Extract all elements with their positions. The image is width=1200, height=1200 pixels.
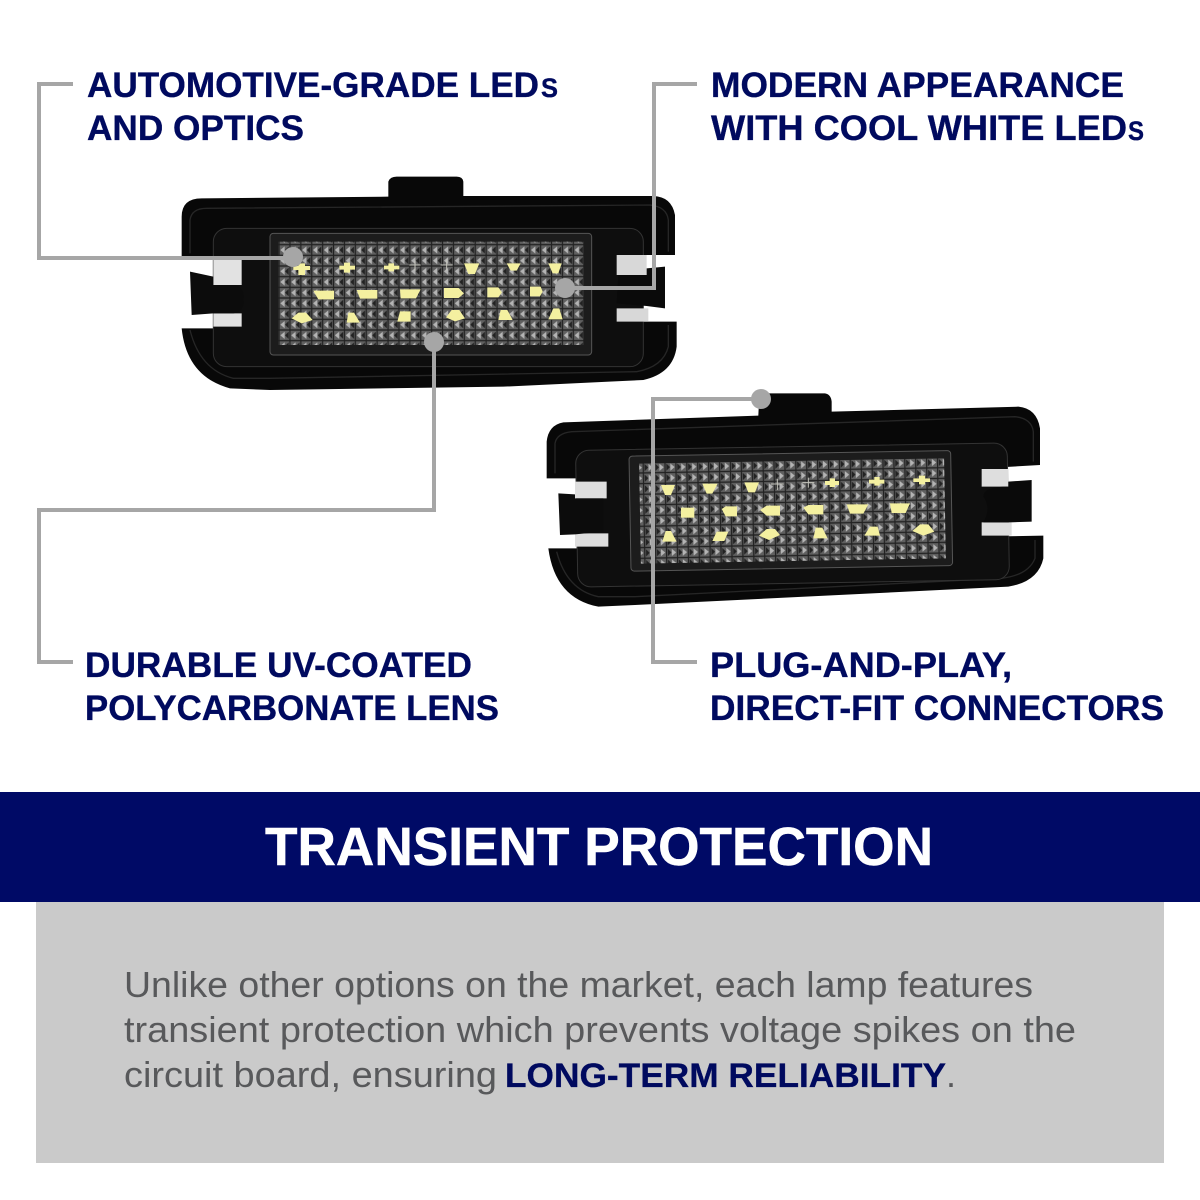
- banner heading: TRANSIENT PROTECTION: [265, 817, 933, 877]
- right mounting tabs: [982, 469, 1012, 536]
- housing trim: [190, 205, 668, 378]
- callout text: plug-and-play direct-fit connectors: DIRECT-FIT CONNECTORS: [710, 689, 1164, 728]
- description text: [124, 964, 1076, 1095]
- callout text: durable UV-coated polycarbonate lens: DURABLE UV-COATED: [85, 646, 472, 685]
- inner lens: [270, 233, 592, 355]
- lamp photo: upper lamp: [182, 177, 677, 390]
- inner lens: [629, 451, 953, 571]
- banner: transient protection: [0, 792, 1200, 902]
- housing trim: [555, 417, 1035, 597]
- callout text: modern appearance with cool white LEDs: [711, 66, 1144, 148]
- callout text: modern appearance with cool white LEDs: WITH COOL WHITE LED: [711, 109, 1127, 148]
- callout text: modern appearance with cool white LEDs: MODERN APPEARANCE: [711, 66, 1124, 105]
- description text: circuit board, ensuring: [124, 1054, 497, 1095]
- lamp housing: [182, 177, 677, 390]
- callout leader: automotive-grade LEDs: [39, 84, 303, 267]
- lens frame: [213, 228, 643, 367]
- textured optic grid: [639, 458, 946, 564]
- description text: transient protection which prevents voltage spikes on the: [124, 1009, 1076, 1050]
- callout text: plug-and-play direct-fit connectors: PLUG-AND-PLAY,: [710, 646, 1012, 685]
- callout text: plug-and-play direct-fit connectors: [710, 646, 1164, 728]
- callout text: automotive-grade LEDs and optics: AUTOMOTIVE-GRADE LED: [87, 66, 539, 105]
- lamp housing: [547, 393, 1043, 607]
- callout leader: polycarbonate lens: [39, 332, 444, 662]
- right clip: [983, 480, 1032, 522]
- callout text: durable UV-coated polycarbonate lens: POLYCARBONATE LENS: [85, 689, 499, 728]
- callout text: durable UV-coated polycarbonate lens: [85, 646, 499, 728]
- lens frame: [576, 443, 1009, 587]
- lamp photo: lower lamp: [547, 393, 1043, 607]
- callout text: automotive-grade LEDs and optics: S: [541, 73, 558, 103]
- description text: LONG-TERM RELIABILITY: [505, 1057, 946, 1095]
- left clip: [558, 493, 603, 535]
- callout leader: cool white LEDs: [555, 84, 697, 298]
- panel: description: [36, 902, 1164, 1163]
- left mounting tabs: [213, 260, 242, 327]
- left mounting tabs: [575, 482, 608, 547]
- left clip: [190, 272, 244, 315]
- right clip: [617, 267, 665, 308]
- LEDs: [661, 476, 934, 542]
- callout leader: connectors: [653, 389, 771, 662]
- callout text: modern appearance with cool white LEDs: S: [1128, 116, 1144, 146]
- callout text: automotive-grade LEDs and optics: AND OPTICS: [87, 109, 304, 148]
- callout text: automotive-grade LEDs and optics: [87, 66, 558, 148]
- textured optic grid: [278, 242, 583, 345]
- description text: .: [946, 1054, 956, 1095]
- right mounting tabs: [617, 255, 648, 322]
- description text: Unlike other options on the market, each lamp features: [124, 964, 1033, 1005]
- LEDs: [292, 259, 563, 323]
